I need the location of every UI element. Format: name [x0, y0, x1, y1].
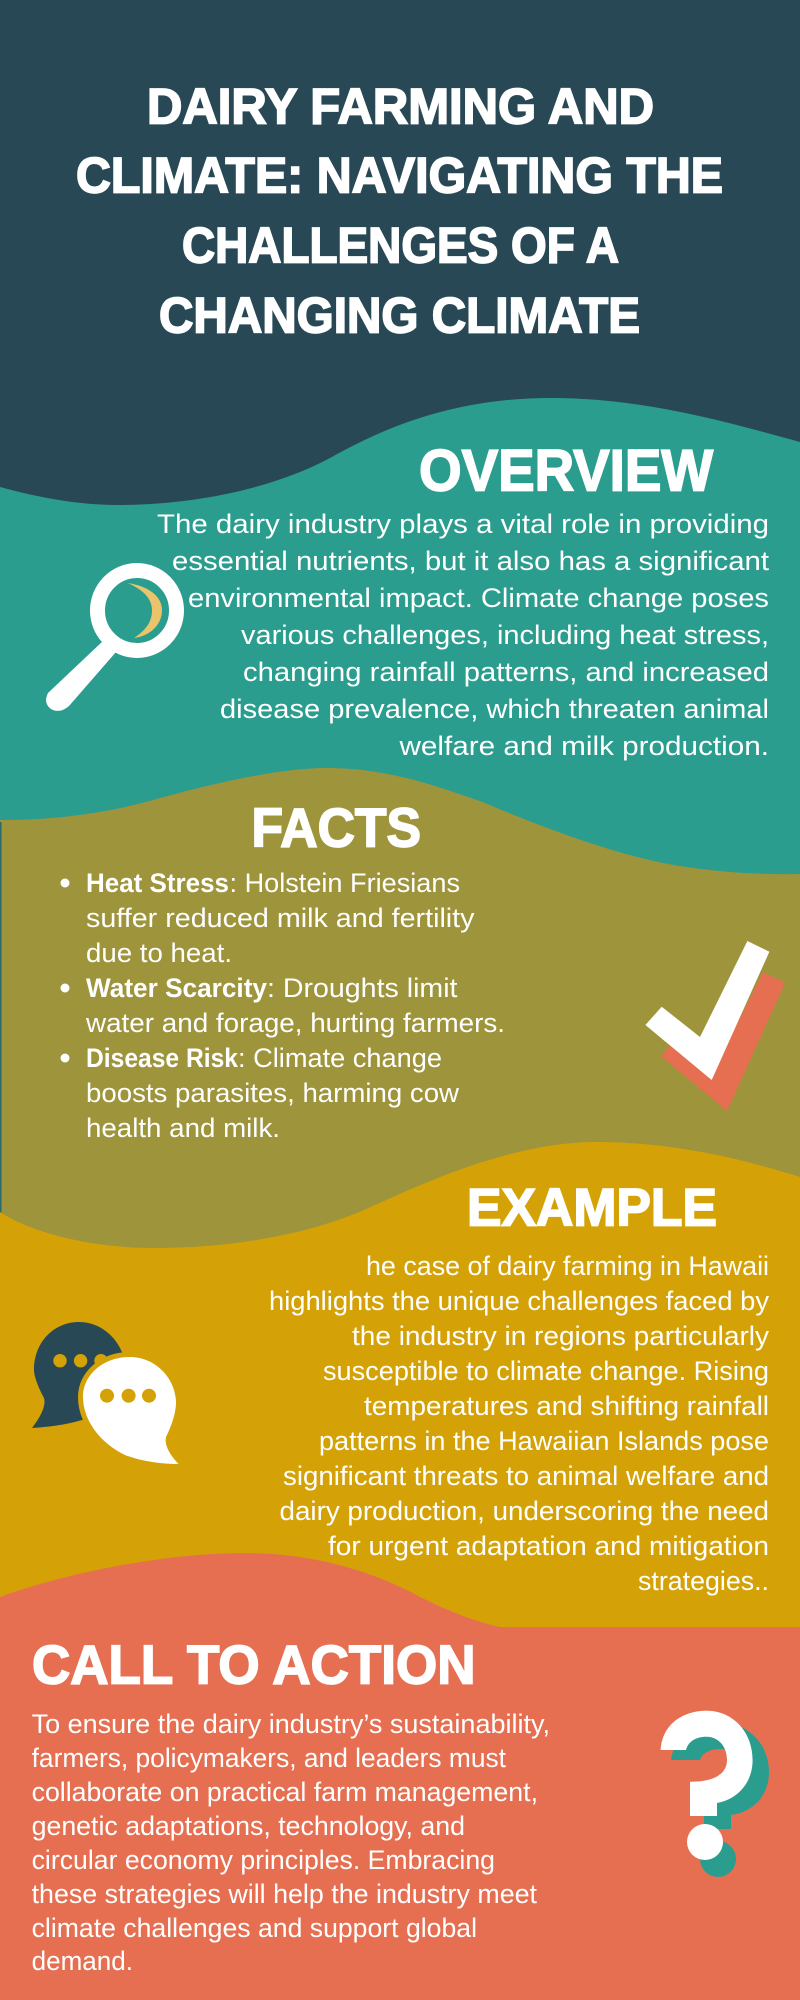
call to action text: demand. [32, 1946, 133, 1976]
fact: disease risk: : Climate change [238, 1043, 442, 1073]
fact: heat stress: : Holstein Friesians [230, 868, 460, 898]
facts wave background [0, 768, 800, 1300]
example wave background [0, 1142, 800, 1700]
example text: the industry in regions particularly [352, 1321, 770, 1351]
overview text: various challenges, including heat stress, [241, 620, 769, 650]
example text: strategies.. [638, 1566, 769, 1596]
title: CLIMATE: NAVIGATING THE [76, 148, 723, 204]
call to action text: circular economy principles. Embracing [32, 1845, 495, 1875]
panel: overview [0, 398, 800, 900]
fact: water scarcity [60, 973, 505, 1038]
overview text: essential nutrients, but it also has a significant [172, 546, 770, 576]
call to action text: these strategies will help the industry meet [32, 1879, 537, 1909]
call to action text: To ensure the dairy industry’s sustainability, [32, 1709, 550, 1739]
overview heading: OVERVIEW [419, 438, 713, 504]
call to action wave background [0, 1553, 800, 2000]
panel: call to action [0, 1553, 800, 2000]
example text: dairy production, underscoring the need [280, 1496, 769, 1526]
fact: water scarcity: water and forage, hurting farmers. [85, 1008, 505, 1038]
icon: speech bubbles [32, 1322, 178, 1464]
example text: he case of dairy farming in Hawaii [366, 1251, 769, 1281]
fact: water scarcity: Water Scarcity [86, 973, 267, 1003]
fact: heat stress: due to heat. [86, 938, 232, 968]
facts heading: FACTS [252, 796, 421, 858]
overview text [157, 509, 770, 761]
fact: disease risk: health and milk. [86, 1113, 280, 1143]
call to action text: climate challenges and support global [32, 1913, 477, 1943]
panel: facts [0, 768, 800, 1300]
overview text: changing rainfall patterns, and increased [243, 657, 769, 687]
call to action text: genetic adaptations, technology, and [32, 1811, 465, 1841]
icon: check mark [645, 941, 785, 1111]
header panel background [0, 0, 800, 520]
example text: for urgent adaptation and mitigation [328, 1531, 769, 1561]
fact: water scarcity: : Droughts limit [267, 973, 458, 1003]
fact: disease risk [60, 1043, 460, 1143]
example text: highlights the unique challenges faced by [269, 1286, 770, 1316]
fact: disease risk: Disease Risk [86, 1043, 238, 1073]
fact: heat stress: suffer reduced milk and fertility [86, 903, 475, 933]
call to action text [32, 1709, 550, 1976]
title: CHANGING CLIMATE [159, 288, 640, 344]
title: CHALLENGES OF A [182, 218, 619, 274]
example heading: EXAMPLE [467, 1178, 717, 1238]
overview text: The dairy industry plays a vital role in providing [157, 509, 769, 539]
facts list [60, 868, 505, 1143]
title [76, 78, 723, 344]
example text: significant threats to animal welfare and [283, 1461, 769, 1491]
fact: disease risk: boosts parasites, harming cow [86, 1078, 460, 1108]
overview text: environmental impact. Climate change poses [188, 583, 769, 613]
title: DAIRY FARMING AND [147, 78, 654, 134]
example text: temperatures and shifting rainfall [364, 1391, 769, 1421]
fact: heat stress [60, 868, 475, 968]
example text: susceptible to climate change. Rising [323, 1356, 769, 1386]
example text [269, 1251, 770, 1596]
overview wave background [0, 398, 800, 900]
icon: question mark [661, 1711, 769, 1877]
panel: example [0, 1142, 800, 1700]
call to action text: farmers, policymakers, and leaders must [32, 1743, 506, 1773]
overview text: disease prevalence, which threaten animal [220, 694, 769, 724]
icon: magnifying glass [46, 570, 177, 711]
fact: heat stress: Heat Stress [86, 868, 229, 898]
overview text: welfare and milk production. [398, 731, 769, 761]
example text: patterns in the Hawaiian Islands pose [319, 1426, 769, 1456]
call to action heading: CALL TO ACTION [32, 1634, 476, 1696]
call to action text: collaborate on practical farm management, [32, 1777, 538, 1807]
